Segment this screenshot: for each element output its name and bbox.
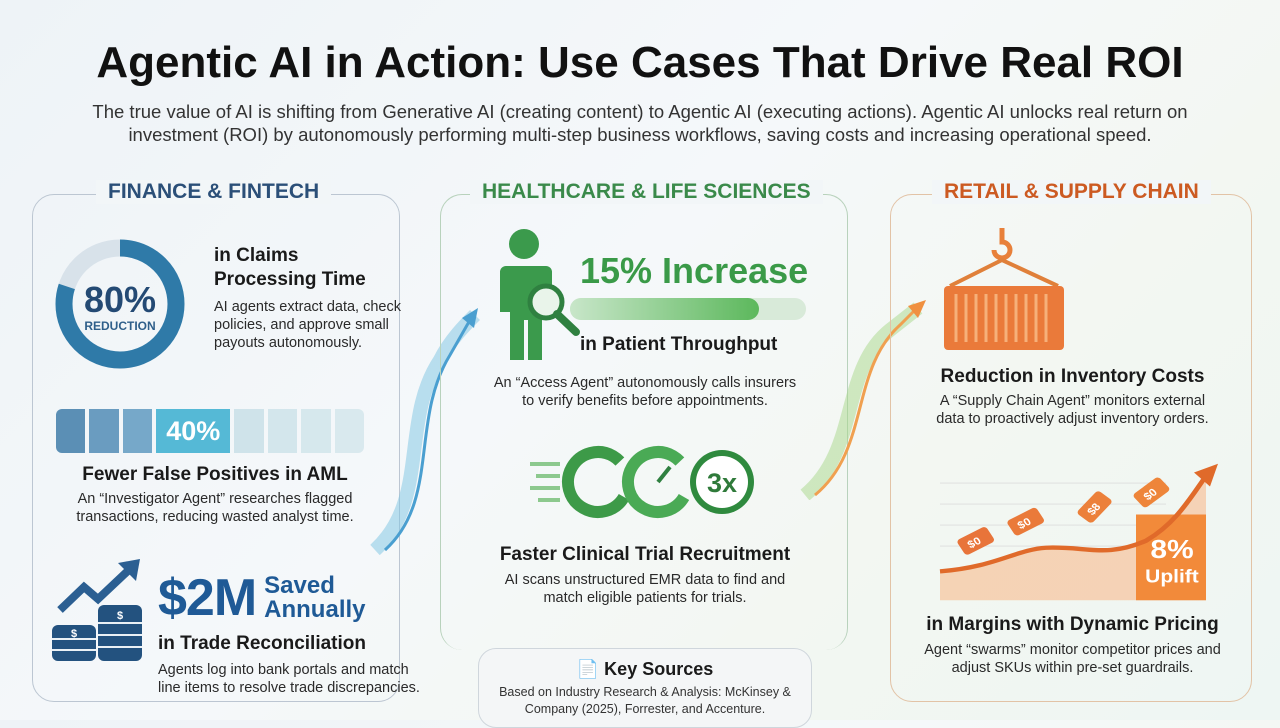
icon: gauges 3x <box>530 446 754 518</box>
heading: healthcare: HEALTHCARE & LIFE SCIENCES <box>482 180 811 203</box>
stat: 15% increase: 15% Increase <box>580 250 808 291</box>
text: inventory: Reduction in Inventory Costs <box>941 366 1204 387</box>
donut chart 80% <box>56 240 184 368</box>
text: AML: An “Investigator Agent” researches flagged transactions, reducing wasted analyst time. <box>76 491 354 525</box>
heading: retail: RETAIL & SUPPLY CHAIN <box>944 180 1199 203</box>
icon: coins and arrow <box>52 559 142 661</box>
key sources box: 📄 Key Sources <box>577 659 713 679</box>
text: trade: in Trade Reconciliation <box>158 633 366 654</box>
text: margins: in Margins with Dynamic Pricing <box>926 614 1219 635</box>
chart: dynamic pricing: $8 <box>1085 501 1104 518</box>
chart: dynamic pricing: $0 <box>1142 487 1160 503</box>
text: clinical trial <box>500 544 790 606</box>
bar 40%: 40% <box>166 416 220 446</box>
bar 40% <box>56 409 364 453</box>
title: Agentic AI in Action: Use Cases That Drive Real ROI <box>96 38 1184 87</box>
stat: $2M: $2M <box>158 569 256 627</box>
arrow: green-orange swoosh <box>800 300 926 500</box>
heading: finance: FINANCE & FINTECH <box>108 180 319 203</box>
subtitle: The true value of AI is shifting from Generative AI (creating content) to Agentic AI (executing actions). Agentic AI unlocks real return on investment (ROI) by autonomously performing multi-step business workflows, saving costs and increasing operational speed. <box>92 101 1188 145</box>
text: clinical trial: AI scans unstructured EMR data to find and match eligible patients for trials. <box>505 572 785 606</box>
key sources box: Based on Industry Research & Analysis: McKinsey & Company (2025), Forrester, and Accenture. <box>499 685 791 716</box>
chart: dynamic pricing: $0 <box>1016 516 1034 532</box>
text: access agent: An “Access Agent” autonomously calls insurers to verify benefits before appointments. <box>494 375 796 409</box>
icon: gauges 3x: 3x <box>707 468 737 498</box>
text: clinical trial: Faster Clinical Trial Recruitment <box>500 544 790 565</box>
progress bar <box>570 298 806 320</box>
text: claims: Processing Time <box>214 269 366 290</box>
text: patient throughput: in Patient Throughput <box>580 334 777 355</box>
chart: dynamic pricing: 8% <box>1150 534 1194 564</box>
text: trade <box>158 633 420 696</box>
text: claims: AI agents extract data, check policies, and approve small payouts autonomously. <box>214 299 401 351</box>
stat: $2M: Saved <box>264 572 335 599</box>
icon: coins and arrow: $ <box>71 628 77 640</box>
icon: container <box>944 228 1064 350</box>
text: claims <box>214 245 401 351</box>
text: claims: in Claims <box>214 245 298 266</box>
stat: $2M <box>158 569 366 627</box>
panel: finance <box>32 180 420 702</box>
text: inventory: A “Supply Chain Agent” monitors external data to proactively adjust inventory orders. <box>936 393 1209 427</box>
text: trade: Agents log into bank portals and match line items to resolve trade discrepancies. <box>158 662 420 696</box>
arrow: blue swoosh <box>370 308 480 555</box>
text: AML <box>76 464 354 525</box>
chart: dynamic pricing: Uplift <box>1145 567 1199 587</box>
chart: dynamic pricing <box>940 464 1218 600</box>
text: inventory <box>936 366 1209 427</box>
text: margins <box>924 614 1221 676</box>
stat: $2M: Annually <box>264 596 366 623</box>
chart: dynamic pricing: $0 <box>966 536 984 551</box>
panel: retail <box>890 180 1252 702</box>
panel: healthcare <box>440 180 848 650</box>
donut chart 80%: 80% <box>84 279 156 320</box>
icon: person with magnifier <box>500 229 580 360</box>
text: AML: Fewer False Positives in AML <box>82 464 348 485</box>
donut chart 80%: REDUCTION <box>84 319 156 333</box>
icon: coins and arrow: $ <box>117 610 123 622</box>
key sources box <box>478 648 812 728</box>
text: margins: Agent “swarms” monitor competitor prices and adjust SKUs within pre-set guardrails. <box>924 642 1221 676</box>
